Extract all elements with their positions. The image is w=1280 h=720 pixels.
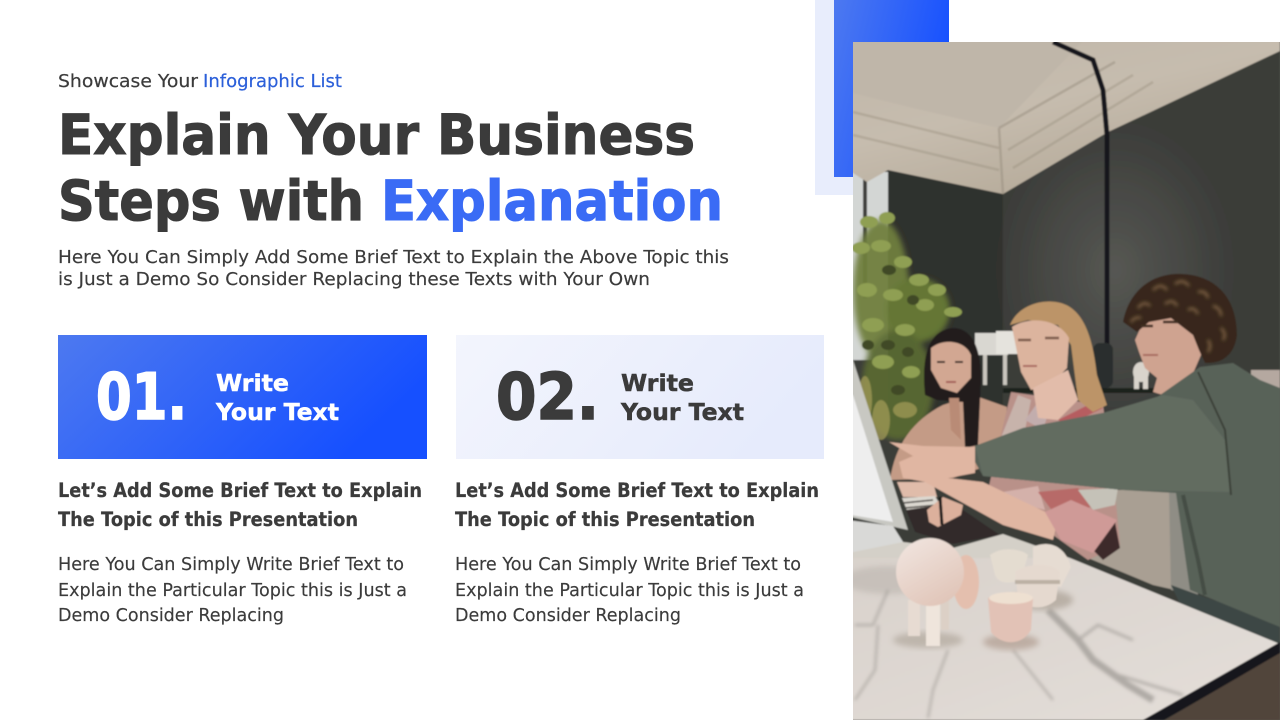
intro text: Here You Can Simply Add Some Brief Text to Explain the Above Topic this [58, 248, 729, 268]
step label 01: Your Text [215, 400, 339, 426]
monitor [853, 360, 909, 531]
trousers and shadow [1171, 585, 1280, 648]
step number 02: 02. [496, 361, 599, 435]
title [58, 103, 723, 233]
body text: column 1: Demo Consider Replacing [58, 606, 284, 626]
panel: step 02 [456, 335, 824, 459]
marble veins [855, 590, 1183, 718]
subheading: column 2: Let’s Add Some Brief Text to Explain [455, 479, 819, 502]
paper [853, 520, 904, 553]
woman in plaid shirt [988, 301, 1120, 560]
plant [852, 212, 962, 440]
subheading: column 2: The Topic of this Presentation [455, 508, 755, 531]
wall [833, 20, 1280, 720]
body text: column 2 [455, 555, 804, 626]
panel: step 01 [58, 335, 427, 459]
subheading: column 2 [455, 479, 819, 531]
subheading: column 1: The Topic of this Presentation [58, 508, 358, 531]
pink cup [983, 592, 1039, 650]
pointing hand and forearm [889, 442, 1058, 540]
shelf objects [975, 331, 1280, 393]
tablet [906, 503, 1000, 544]
body text: column 1: Explain the Particular Topic this is Just a [58, 581, 407, 601]
ceiling [853, 42, 1280, 195]
man's sweater [975, 363, 1280, 627]
ceramic sphere sculpture [893, 538, 979, 648]
step label 01 [215, 371, 339, 426]
intro text: is Just a Demo So Consider Replacing these Texts with Your Own [58, 270, 650, 290]
table edge [1143, 642, 1280, 720]
intro text [58, 248, 729, 290]
chair [1088, 490, 1175, 590]
body text: column 1 [58, 555, 407, 626]
subheading: column 1: Let’s Add Some Brief Text to Explain [58, 479, 422, 502]
keyboard stripes [901, 496, 939, 511]
title: Steps with [58, 169, 364, 233]
title: Explanation [381, 169, 723, 233]
woman in pink shirt [890, 328, 1007, 497]
writing hand and pen [927, 497, 963, 527]
ceramic bowls [990, 544, 1073, 610]
title: Explain Your Business [58, 103, 695, 167]
man's hair and face [1123, 274, 1237, 398]
photo: team working at a desk [833, 20, 1280, 720]
body text: column 2: Explain the Particular Topic this is Just a [455, 581, 804, 601]
step label 02: Write [621, 371, 694, 397]
step label 02 [620, 371, 744, 426]
plaid cuff [1045, 500, 1117, 553]
step number 01: 01. [96, 361, 187, 435]
decorative pale blue block [815, 0, 875, 195]
step label 02: Your Text [620, 400, 744, 426]
eyebrow heading [58, 72, 342, 92]
step label 01: Write [216, 371, 289, 397]
body text: column 2: Demo Consider Replacing [455, 606, 681, 626]
marble table [833, 558, 1280, 720]
eyebrow heading: Infographic List [203, 72, 342, 92]
body text: column 1: Here You Can Simply Write Brief Text to [58, 555, 404, 575]
eyebrow heading: Showcase Your [58, 72, 199, 92]
wall pipe [1053, 42, 1107, 372]
decorative blue block [834, 0, 949, 177]
subheading: column 1 [58, 479, 422, 531]
window strip [853, 171, 890, 362]
body text: column 2: Here You Can Simply Write Brief Text to [455, 555, 801, 575]
